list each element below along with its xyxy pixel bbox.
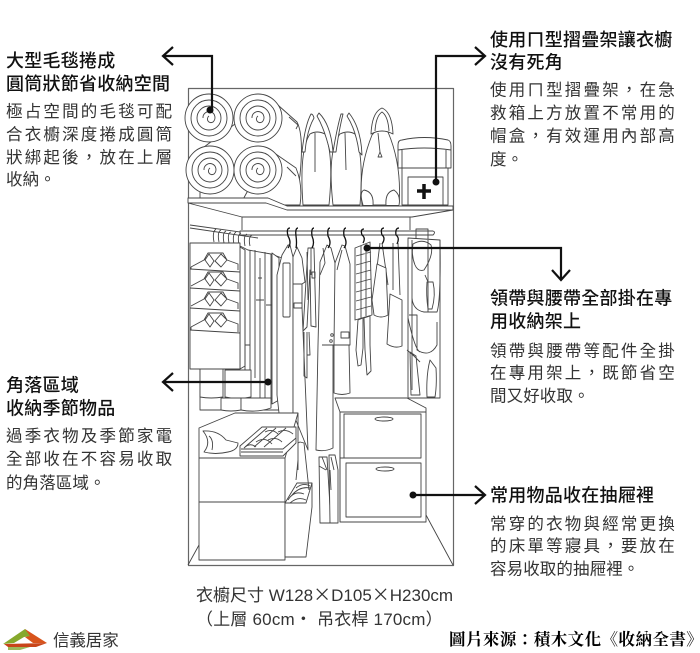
upper shelf: [188, 198, 453, 230]
callout: corner area: [6, 373, 272, 492]
heading: ties and belts: 領帶與腰帶全部掛在專: [490, 288, 672, 308]
heading: blankets: 圓筒狀節省收納空間: [6, 74, 170, 94]
heading: drawers: 常用物品收在抽屜裡: [490, 486, 654, 506]
belts and accessories: [372, 243, 402, 347]
heading: corner area: 收納季節物品: [6, 398, 116, 418]
pointer arrow: ties and belts: [364, 244, 570, 280]
body: ties and belts: 間又好收取。: [490, 386, 590, 406]
callout: folding rack: [432, 30, 677, 186]
heading: folding rack: 沒有死角: [490, 52, 563, 72]
body: blankets: 極占空間的毛毯可配: [6, 102, 174, 121]
body: ties and belts: 領帶與腰帶等配件全掛: [490, 342, 677, 360]
body: ties and belts: 在專用架上，既節省空: [490, 364, 677, 382]
heading: folding rack: 使用ㄇ型摺疊架讓衣櫥: [490, 30, 672, 50]
hanging pocket organizer: [407, 238, 440, 398]
logo mark: [3, 629, 47, 650]
pointer arrow: blankets: [163, 47, 214, 114]
body: blankets: 合衣櫥深度捲成圓筒: [6, 125, 174, 144]
callout: ties and belts: [364, 244, 677, 406]
callout: drawers: [410, 486, 677, 578]
heading: ties and belts: 用收納架上: [490, 312, 581, 332]
wardrobe frame: [188, 88, 454, 566]
clothes rail: [190, 225, 434, 240]
hangers on rail: [213, 228, 399, 248]
shirts in garment bag: [190, 243, 245, 369]
body: blankets: 狀綁起後，放在上層: [6, 148, 174, 167]
body: blankets: 收納。: [6, 170, 56, 189]
body: corner area: 全部收在不容易收取: [6, 450, 174, 468]
hanging coats and dresses: [272, 245, 350, 451]
body: drawers: 常穿的衣物與經常更換: [490, 514, 677, 534]
pointer arrow: drawers: [410, 486, 485, 504]
handbags: [302, 108, 400, 205]
body: drawers: 容易收取的抽屜裡。: [490, 560, 639, 578]
wardrobe dimensions caption: 衣櫥尺寸 W128×D105×H230cm: [196, 581, 453, 607]
blanket rolls: [185, 94, 301, 205]
body: folding rack: 使用ㄇ型摺疊架，在急: [490, 80, 677, 100]
folded items on floor: [319, 455, 338, 523]
tie rack with ties: [355, 242, 372, 375]
logo wordmark: 信義居家: [53, 631, 119, 650]
logo: [3, 629, 119, 650]
image source credit: 圖片來源：積木文化《收納全書》: [449, 629, 700, 649]
body: folding rack: 度。: [490, 150, 523, 169]
body: folding rack: 帽盒，有效運用內部高: [490, 126, 677, 146]
callout: blankets: [6, 47, 214, 189]
body: corner area: 的角落區域。: [6, 474, 106, 492]
pointer arrow: folding rack: [432, 47, 485, 186]
storage box with shoes and baskets: [199, 413, 312, 560]
body: corner area: 過季衣物及季節家電: [6, 426, 174, 446]
two drawer unit: [335, 398, 426, 522]
pointer arrow: corner area: [163, 373, 272, 391]
wardrobe dimensions caption: （上層 60cm・ 吊衣桿 170cm）: [196, 610, 443, 629]
first aid box and hat box: [398, 138, 451, 205]
body: folding rack: 救箱上方放置不常用的: [490, 104, 677, 122]
body: drawers: 的床單等寢具，要放在: [490, 536, 677, 556]
heading: corner area: 角落區域: [6, 376, 79, 396]
hanging clothes behind garment bag: [200, 246, 282, 411]
heading: blankets: 大型毛毯捲成: [6, 51, 116, 71]
wardrobe illustration: [185, 88, 454, 566]
